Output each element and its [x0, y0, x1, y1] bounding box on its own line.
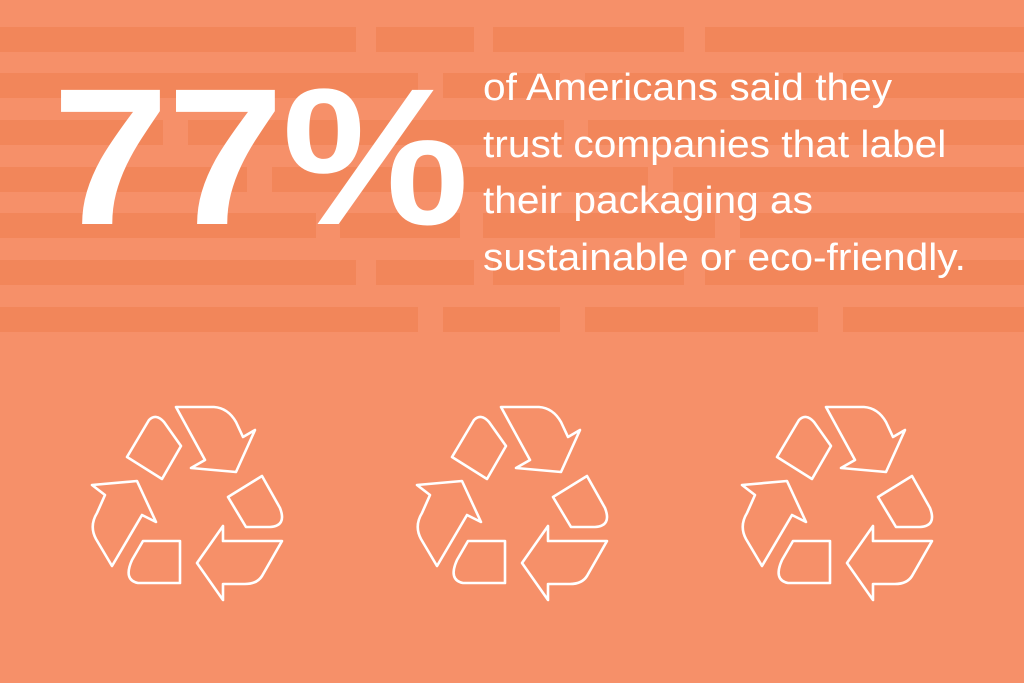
big number: 77%: [52, 48, 467, 266]
statement text: trust companies that label: [483, 124, 946, 166]
statement text: their packaging as: [483, 180, 813, 222]
statement text: sustainable or eco-friendly.: [483, 236, 966, 278]
statement text: of Americans said they: [483, 67, 892, 109]
icon: recycle 1: [92, 407, 282, 600]
icon: recycle 2: [417, 407, 607, 600]
icon: recycle 3: [742, 407, 932, 600]
statement text: [483, 67, 966, 278]
